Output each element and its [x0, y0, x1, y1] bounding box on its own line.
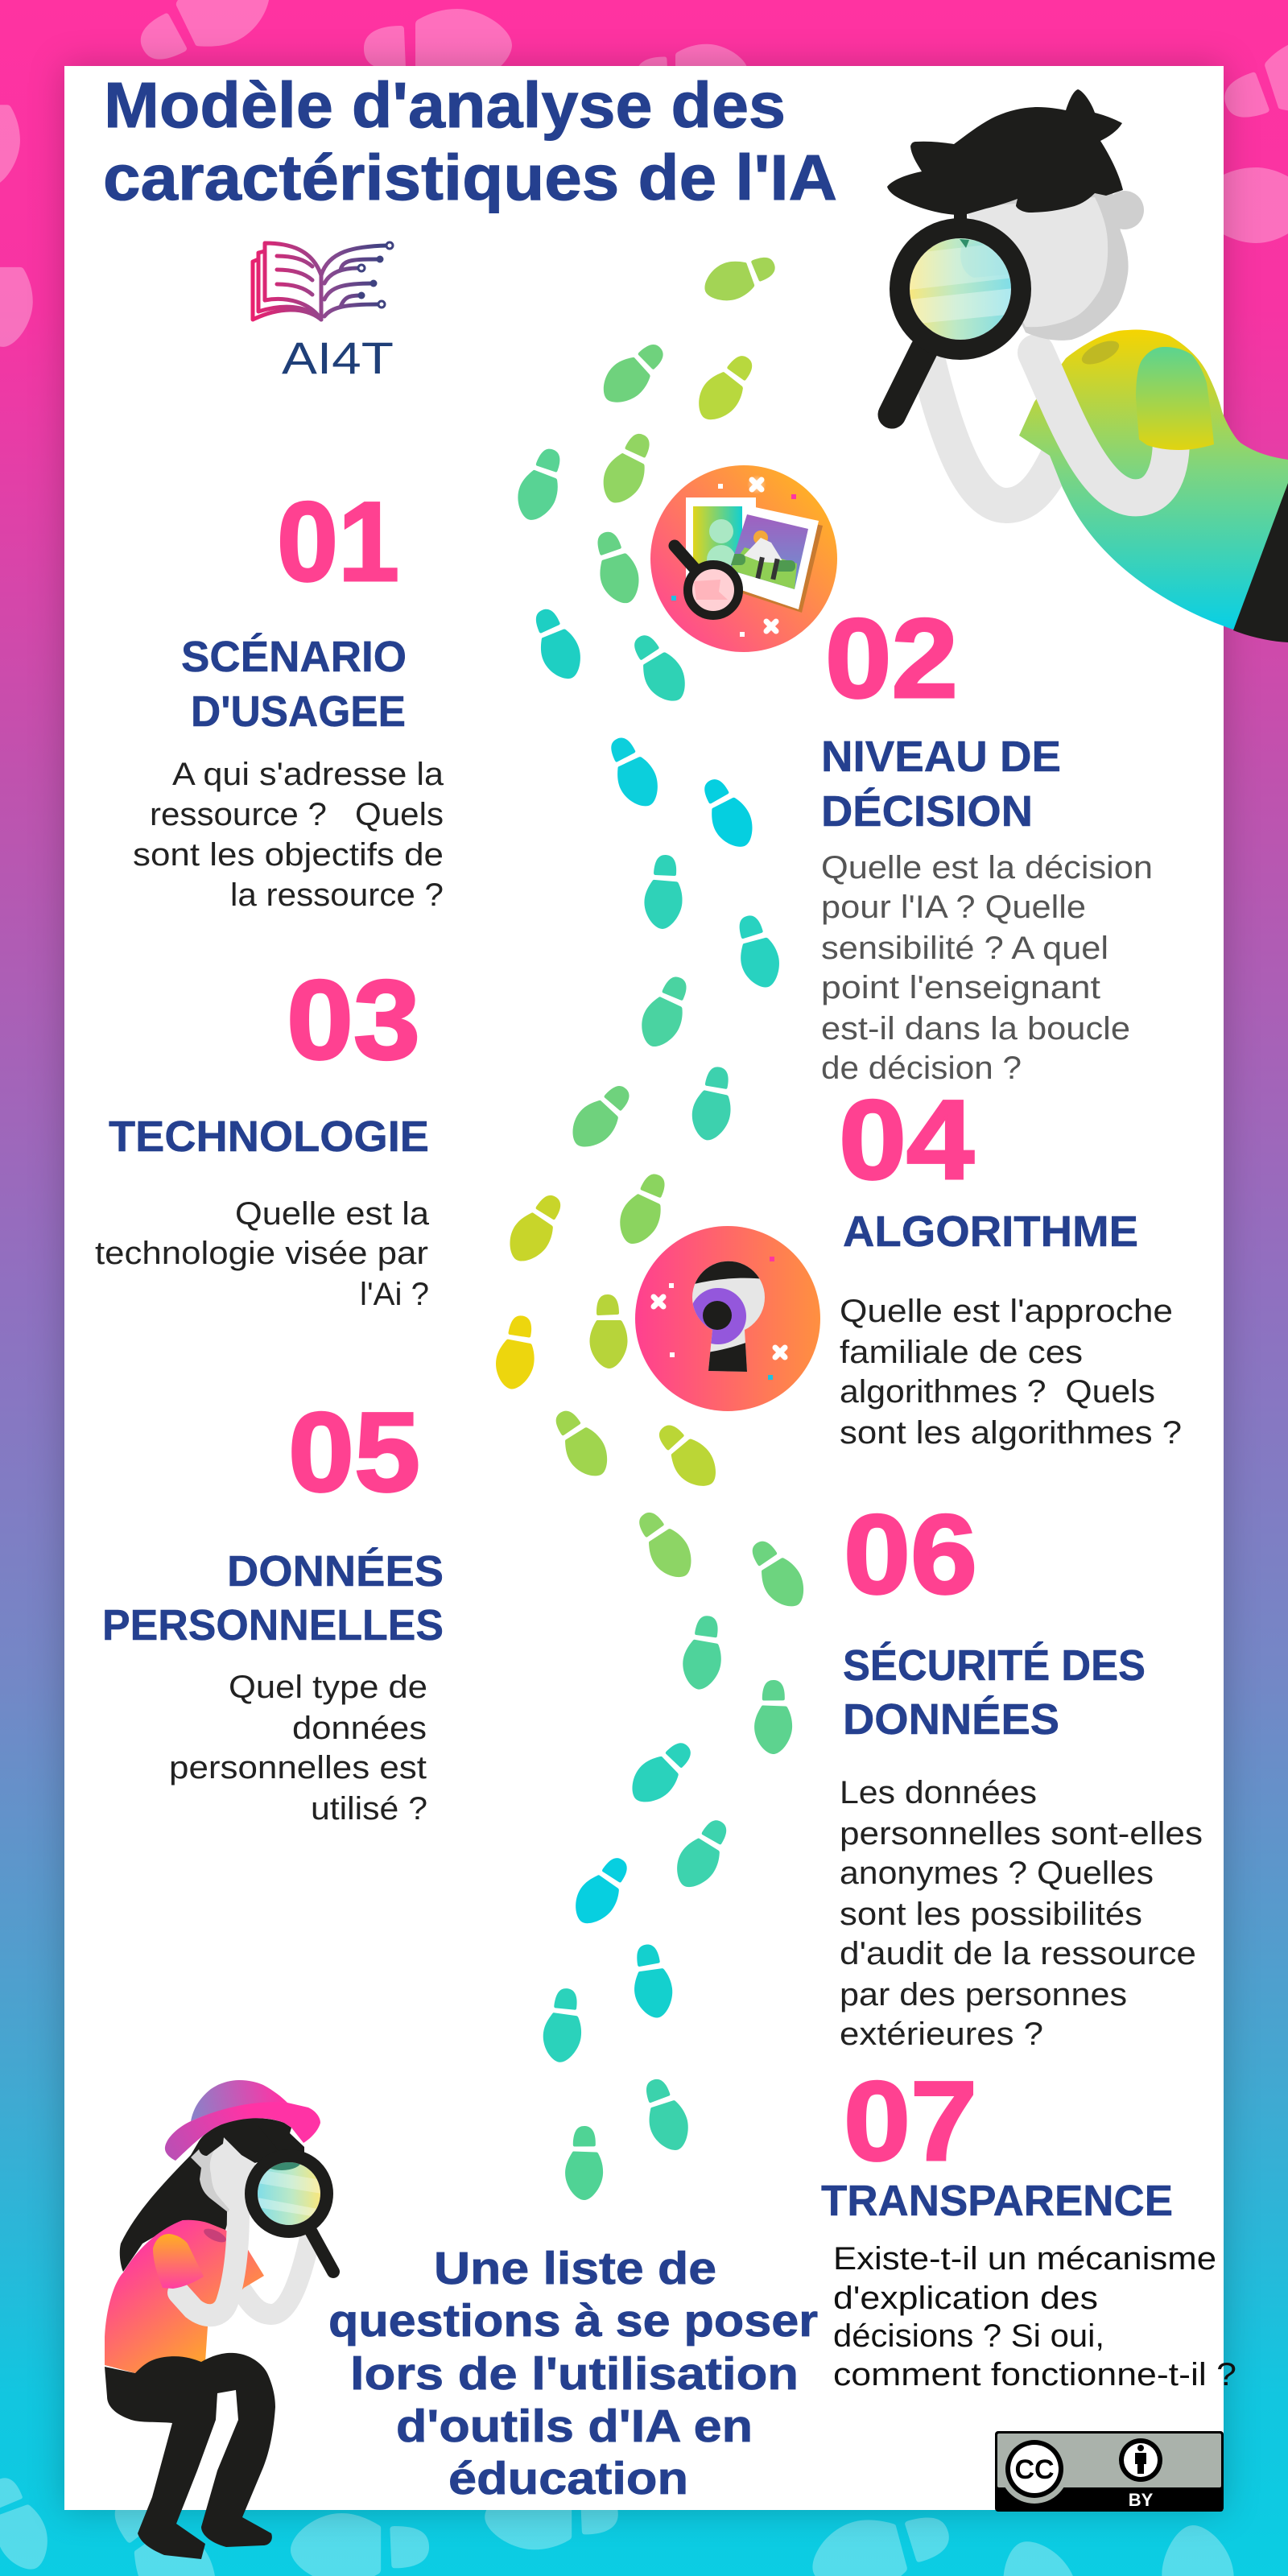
section 02: niveau de décision: Quelle est la décision — [821, 850, 1153, 886]
section 04: algorithme: ALGORITHME — [843, 1208, 1138, 1256]
section 04: algorithme: sont les algorithmes ? — [840, 1415, 1182, 1451]
section 06: sécurité des données: DONNÉES — [843, 1695, 1059, 1744]
section 01: scénario d'usage: 01 — [277, 478, 399, 605]
section 04: algorithme — [839, 1076, 1182, 1451]
closing statement — [328, 2243, 818, 2504]
title: caractéristiques de l'IA — [103, 142, 837, 213]
section 06: sécurité des données: personnelles sont-elles — [840, 1816, 1203, 1852]
section 01: scénario d'usage: SCÉNARIO — [181, 633, 407, 681]
section 04: algorithme: algorithmes ? Quels — [840, 1374, 1155, 1410]
section 02: niveau de décision — [821, 595, 1153, 1086]
section 02: niveau de décision: 02 — [825, 595, 958, 721]
title — [103, 69, 837, 213]
section 02: niveau de décision: point l'enseignant — [821, 970, 1100, 1005]
section 02: niveau de décision: DÉCISION — [821, 787, 1033, 836]
section 04: algorithme: 04 — [839, 1076, 974, 1203]
section 07: transparence: comment fonctionne-t-il ? — [833, 2357, 1236, 2392]
section 07: transparence — [821, 2058, 1236, 2392]
section 06: sécurité des données: d'audit de la ressource — [840, 1936, 1196, 1971]
section 07: transparence: Existe-t-il un mécanisme — [833, 2241, 1216, 2277]
section 02: niveau de décision: est-il dans la boucle — [821, 1011, 1130, 1046]
section 05: données personnelles: PERSONNELLES — [102, 1601, 444, 1649]
section 01: scénario d'usage: A qui s'adresse la — [172, 757, 444, 792]
section 02: niveau de décision: sensibilité ? A quel — [821, 931, 1108, 966]
section 02: niveau de décision: pour l'IA ? Quelle — [821, 890, 1086, 925]
section 01: scénario d'usage: D'USAGEE — [191, 687, 406, 736]
AI4T logo — [253, 242, 394, 383]
section 05: données personnelles: DONNÉES — [227, 1547, 444, 1596]
section 06: sécurité des données: anonymes ? Quelles — [840, 1856, 1154, 1891]
section 07: transparence: d'explication des — [833, 2281, 1098, 2316]
section 07: transparence: décisions ? Si oui, — [833, 2318, 1104, 2354]
AI4T logo: AI4T — [282, 332, 394, 383]
section 04: algorithme: familiale de ces — [840, 1335, 1083, 1370]
licence badge CC BY — [995, 2431, 1224, 2512]
section 07: transparence: TRANSPARENCE — [821, 2177, 1173, 2225]
section 06: sécurité des données: sont les possibilités — [840, 1897, 1142, 1932]
section 06: sécurité des données — [840, 1491, 1203, 2052]
closing statement: questions à se poser — [328, 2295, 818, 2347]
section 02: niveau de décision: NIVEAU DE — [821, 733, 1061, 781]
section 02: niveau de décision: de décision ? — [821, 1051, 1022, 1086]
section 01: scénario d'usage — [133, 478, 444, 913]
closing statement: éducation — [448, 2453, 688, 2504]
section 06: sécurité des données: 06 — [844, 1491, 977, 1617]
section 05: données personnelles: Quel type de — [229, 1670, 427, 1705]
closing statement: Une liste de — [434, 2243, 716, 2294]
section 06: sécurité des données: SÉCURITÉ DES — [843, 1641, 1146, 1690]
section 03: technologie: TECHNOLOGIE — [109, 1113, 429, 1161]
section 03: technologie: technologie visée par — [95, 1236, 428, 1271]
section 03: technologie: 03 — [287, 956, 420, 1083]
section 03: technologie: Quelle est la — [235, 1196, 430, 1232]
section 03: technologie — [95, 956, 430, 1312]
section 05: données personnelles: utilisé ? — [311, 1791, 427, 1827]
icon: photos under magnifier — [650, 465, 837, 652]
section 05: données personnelles: personnelles est — [169, 1750, 427, 1785]
footprint trail — [491, 247, 813, 2201]
licence badge CC BY: CC — [1014, 2454, 1055, 2485]
section 07: transparence: 07 — [844, 2058, 977, 2184]
illustration: detective bottom left — [105, 2080, 333, 2559]
section 05: données personnelles: données — [292, 1711, 427, 1746]
illustration: detective top right — [887, 89, 1288, 642]
section 05: données personnelles — [102, 1389, 444, 1827]
section 06: sécurité des données: extérieures ? — [840, 2017, 1043, 2052]
section 05: données personnelles: 05 — [288, 1389, 420, 1515]
licence badge CC BY: BY — [1129, 2490, 1154, 2510]
closing statement: lors de l'utilisation — [350, 2348, 799, 2400]
section 03: technologie: l'Ai ? — [360, 1277, 429, 1312]
section 01: scénario d'usage: ressource ? Quels — [150, 797, 444, 832]
closing statement: d'outils d'IA en — [396, 2401, 753, 2452]
section 06: sécurité des données: Les données — [840, 1775, 1037, 1810]
section 06: sécurité des données: par des personnes — [840, 1977, 1127, 2013]
icon: eye through keyhole — [635, 1226, 820, 1411]
section 01: scénario d'usage: sont les objectifs de — [133, 837, 444, 873]
title: Modèle d'analyse des — [104, 69, 786, 141]
section 01: scénario d'usage: la ressource ? — [230, 877, 444, 913]
section 04: algorithme: Quelle est l'approche — [840, 1294, 1173, 1329]
